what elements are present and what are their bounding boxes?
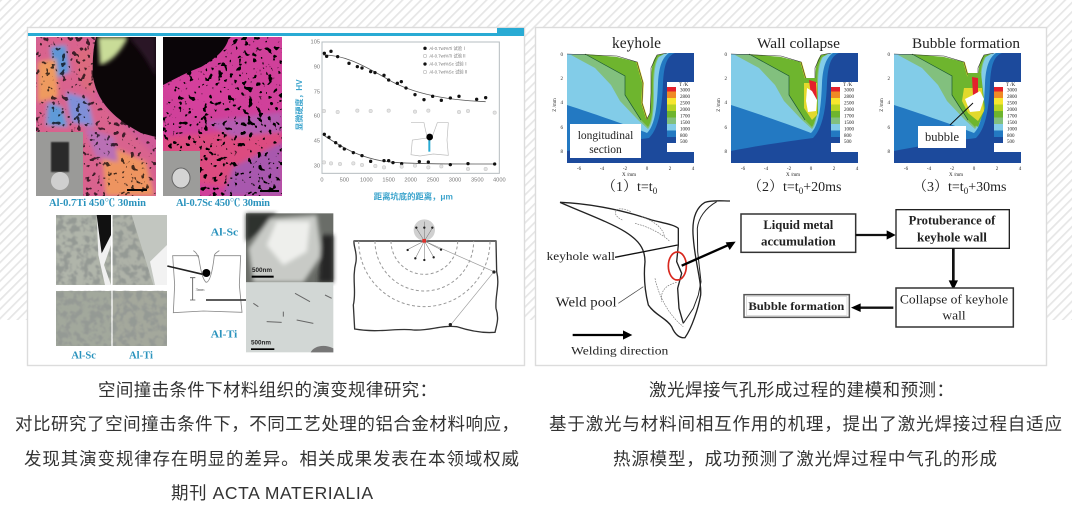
plot caption: 0	[964, 186, 969, 196]
caption: Al-0.7Ti: Al-0.7Ti 450℃ 30min	[49, 197, 146, 209]
text block: impact study description	[15, 380, 519, 503]
axis labels: 4	[560, 101, 564, 106]
weld pool schematic	[547, 201, 736, 357]
chart legend: Al-0.7wt%Sc 试验Ⅰ	[429, 61, 468, 68]
axis labels: 3000	[680, 88, 690, 94]
box: protuberance of keyhole wall: Protuberance of	[909, 214, 996, 228]
axis labels: 4	[692, 167, 695, 172]
micrograph: Al-0.7Ti	[36, 37, 156, 196]
axis labels: 800	[680, 134, 688, 139]
label: Al-Ti under SEM: Al-Ti	[129, 350, 153, 361]
axis labels: -6	[904, 167, 909, 172]
axis labels: 4	[888, 101, 890, 106]
keyhole wall leader line	[615, 245, 678, 257]
text block: impact study description: 期刊 ACTA MATERIALIA	[171, 483, 373, 503]
axis labels: 3000	[844, 88, 854, 94]
axis labels: 2	[833, 167, 836, 172]
axis labels: 6	[724, 126, 728, 131]
axis labels: 1000	[680, 128, 690, 132]
box: collapse of keyhole wall: wall	[942, 309, 966, 323]
axis labels: 1700	[844, 114, 854, 120]
y axis tick labels	[311, 39, 320, 169]
axis labels: 500	[680, 140, 688, 145]
arrow: to bubble formation	[851, 303, 893, 312]
fit curves	[323, 55, 495, 164]
heading: left: 空间撞击条件下材料组织的演变规律研究：	[98, 380, 437, 400]
plot title: Wall collapse	[757, 36, 840, 52]
melt and collapse zone	[802, 78, 818, 125]
axis labels: 800	[1007, 134, 1015, 139]
axis labels: 8	[888, 150, 890, 155]
crater schematic	[167, 251, 246, 313]
melt zone and bubble	[962, 73, 985, 127]
y axis tick labels: 30	[314, 163, 320, 169]
inset crater diagram	[411, 123, 448, 156]
axis labels: 0	[724, 53, 728, 58]
crater schematic: 3mm	[196, 287, 205, 292]
axis labels: 4	[724, 101, 728, 106]
chart legend: Al-0.7wt%Ti 试验Ⅱ	[429, 53, 466, 60]
TEM image: Al-Sc dark: 500nm	[252, 267, 272, 274]
axis labels: 500	[844, 140, 852, 145]
text block: welding study description: 基于激光与材料间相互作用的机理，提出了激光焊接过程自适应	[549, 414, 1062, 434]
x axis tick labels: 500	[340, 178, 349, 184]
axis labels: 2800	[844, 95, 854, 100]
x axis tick labels: 1000	[360, 178, 373, 184]
axis labels: 2800	[1007, 95, 1018, 100]
text block: welding study description: 热源模型，成功预测了激光焊过程中气孔的形成	[613, 449, 997, 469]
axis labels: 1700	[1007, 114, 1018, 120]
plot caption: （2）t=t	[748, 180, 799, 195]
axis labels: T /K	[679, 83, 689, 88]
box: protuberance of keyhole wall	[896, 210, 1009, 248]
box: liquid metal accumulation	[741, 214, 856, 252]
label: weld pool: Weld pool	[556, 296, 617, 311]
bubble label box	[918, 126, 966, 148]
TEM image: Al-Ti light: 500nm	[251, 340, 271, 347]
axis labels: -2	[787, 167, 792, 172]
axis labels: 3000	[1007, 88, 1018, 94]
axis labels: 6	[560, 126, 564, 131]
axis labels: 8	[724, 150, 728, 155]
axis labels: 0	[973, 167, 976, 172]
axis labels: 2	[996, 167, 999, 172]
axis labels: -4	[764, 167, 769, 172]
TEM image: Al-Sc dark	[246, 213, 333, 282]
weld pool leader line	[618, 287, 643, 303]
plot caption: +20ms	[803, 180, 841, 195]
axis labels: 1000	[844, 128, 854, 132]
chart legend	[423, 45, 468, 76]
axis labels: 500	[1007, 140, 1015, 145]
axis labels: 2	[724, 77, 728, 82]
SEM image: fracture Al-Sc	[56, 291, 111, 346]
axis labels: 8	[560, 150, 564, 155]
axis labels: 2800	[680, 95, 690, 100]
y axis tick labels: 60	[314, 114, 320, 120]
box: collapse of keyhole wall	[896, 288, 1013, 327]
axis labels: 1500	[1007, 121, 1018, 126]
axis labels: 0	[810, 167, 813, 172]
section label box: section	[589, 144, 622, 156]
data points: open grey series	[322, 109, 496, 171]
plot caption: 0	[799, 186, 804, 196]
chart legend: Al-0.7wt%Ti 试验Ⅰ	[429, 45, 466, 52]
arrow: to protuberance	[856, 230, 896, 240]
label: Al-Sc near TEM: Al-Sc	[211, 227, 238, 239]
box: bubble formation	[744, 295, 849, 317]
box: liquid metal accumulation: Liquid metal	[763, 218, 834, 232]
axis labels: 2	[888, 77, 890, 82]
label: Al-Ti near TEM: Al-Ti	[211, 329, 237, 341]
x axis title: 距离坑底的距离，μm	[374, 191, 453, 201]
axis labels: -4	[927, 167, 932, 172]
axis labels: 2000	[680, 108, 690, 113]
chart: microhardness vs distance	[294, 39, 506, 201]
axis labels: 800	[844, 134, 852, 139]
axis labels: Z /mm	[880, 98, 885, 112]
SEM image: crater wall Al-Ti	[113, 215, 167, 285]
arrow: to collapse	[949, 248, 958, 290]
axis labels: 2000	[844, 108, 854, 113]
caption: Al-0.7Sc: Al-0.7Sc 450℃ 30min	[176, 197, 270, 209]
melt flow arrows	[615, 209, 683, 327]
axis labels: -2	[623, 167, 628, 172]
x axis tick labels: 4000	[493, 178, 506, 184]
x axis tick labels: 3500	[471, 178, 484, 184]
axis labels: 1500	[680, 121, 690, 126]
bubble label box: bubble	[925, 130, 959, 144]
axis labels: -6	[577, 167, 582, 172]
box: bubble formation: Bubble formation	[748, 299, 845, 313]
axis labels: 0	[888, 53, 890, 58]
contour plot 3: bubble formation	[880, 36, 1022, 196]
SEM micrographs and crater schematic	[56, 215, 246, 361]
axis labels: 0	[560, 53, 564, 58]
axis labels: Z /mm	[717, 98, 722, 112]
plot caption: （1）t=t	[602, 180, 653, 195]
axis labels: 6	[888, 126, 890, 131]
red collapse marker	[668, 252, 686, 280]
axis labels: -2	[950, 167, 955, 172]
plot caption: +30ms	[968, 180, 1006, 195]
panel: laser welding figures	[536, 28, 1046, 366]
axis labels: 4	[856, 167, 859, 172]
x axis tick labels	[320, 178, 506, 184]
plot title: Bubble formation	[912, 36, 1021, 52]
chart legend: Al-0.7wt%Sc 试验Ⅱ	[429, 69, 468, 76]
box: liquid metal accumulation: accumulation	[761, 234, 836, 248]
axis labels: 2500	[680, 102, 690, 106]
box: protuberance of keyhole wall: keyhole wall	[917, 231, 988, 245]
axis labels	[717, 53, 859, 178]
axis labels: 0	[646, 167, 649, 172]
axis labels: -6	[741, 167, 746, 172]
axis labels: T /K	[1006, 83, 1016, 88]
hatched background	[0, 0, 1072, 320]
plot title: keyhole	[612, 35, 661, 52]
axis labels: 4	[1019, 167, 1022, 172]
axis labels: 2000	[1007, 108, 1018, 113]
impact stress-wave schematic	[353, 219, 498, 333]
axis labels: 2500	[1007, 102, 1018, 106]
flowchart: bubble formation process	[741, 210, 1013, 327]
axis labels	[880, 53, 1022, 178]
y axis tick labels: 105	[311, 39, 320, 45]
axis labels: 1700	[680, 114, 690, 120]
label: welding direction: Welding direction	[571, 343, 668, 357]
blue header bar	[28, 28, 524, 36]
axis labels: X /mm	[622, 173, 636, 178]
axis labels: -4	[600, 167, 605, 172]
axis labels: 2	[560, 77, 564, 82]
axis labels: 1500	[844, 121, 854, 126]
axis labels	[553, 53, 695, 178]
axis labels: X /mm	[949, 173, 963, 178]
TEM micrographs	[246, 213, 498, 352]
arrow to flowchart	[682, 242, 736, 266]
section label box	[570, 124, 641, 158]
x axis tick labels: 2000	[404, 178, 417, 184]
panel: impact microstructure figures	[28, 28, 524, 366]
y axis title: 显微硬度，HV	[294, 79, 304, 131]
x axis tick labels: 0	[320, 178, 324, 184]
welding direction arrow	[573, 330, 632, 340]
plot caption: 0	[653, 186, 658, 196]
micrograph: Al-0.7Sc	[163, 37, 282, 196]
plot caption: （3）t=t	[913, 180, 964, 195]
SEM image: crater wall Al-Sc	[56, 215, 111, 285]
text block: impact study description: 发现其演变规律存在明显的差异。相关成果发表在本领域权威	[24, 449, 519, 469]
heading: right: 激光焊接气孔形成过程的建模和预测：	[649, 380, 954, 400]
y axis tick labels: 45	[314, 139, 320, 145]
bubble leader line	[950, 103, 973, 125]
x axis tick labels: 1500	[382, 178, 395, 184]
axis labels: Z /mm	[553, 98, 558, 112]
SEM image: fracture Al-Ti	[113, 291, 167, 346]
axis labels: T /K	[843, 83, 853, 88]
axis labels: X /mm	[786, 173, 800, 178]
section label box: longitudinal	[578, 130, 633, 142]
contour plot 2: wall collapse	[717, 36, 859, 196]
y axis tick labels: 75	[314, 89, 320, 95]
box: collapse of keyhole wall: Collapse of keyhole	[900, 292, 1009, 306]
label: keyhole wall: keyhole wall	[547, 249, 616, 263]
axis labels: 2	[669, 167, 672, 172]
contour plot 1: keyhole	[553, 35, 695, 196]
label: Al-Sc under SEM: Al-Sc	[71, 350, 97, 361]
y axis tick labels: 90	[314, 64, 320, 70]
text block: impact study description: 对比研究了空间撞击条件下，不同工艺处理的铝合金材料响应，	[15, 414, 519, 434]
axis labels: 2500	[844, 102, 854, 106]
text block: welding study description	[549, 380, 1062, 469]
x axis tick labels: 2500	[427, 178, 439, 184]
data points: black series	[323, 50, 496, 166]
x axis tick labels: 3000	[449, 178, 461, 184]
axis labels: 1000	[1007, 128, 1018, 132]
TEM image: Al-Ti light	[246, 282, 333, 352]
